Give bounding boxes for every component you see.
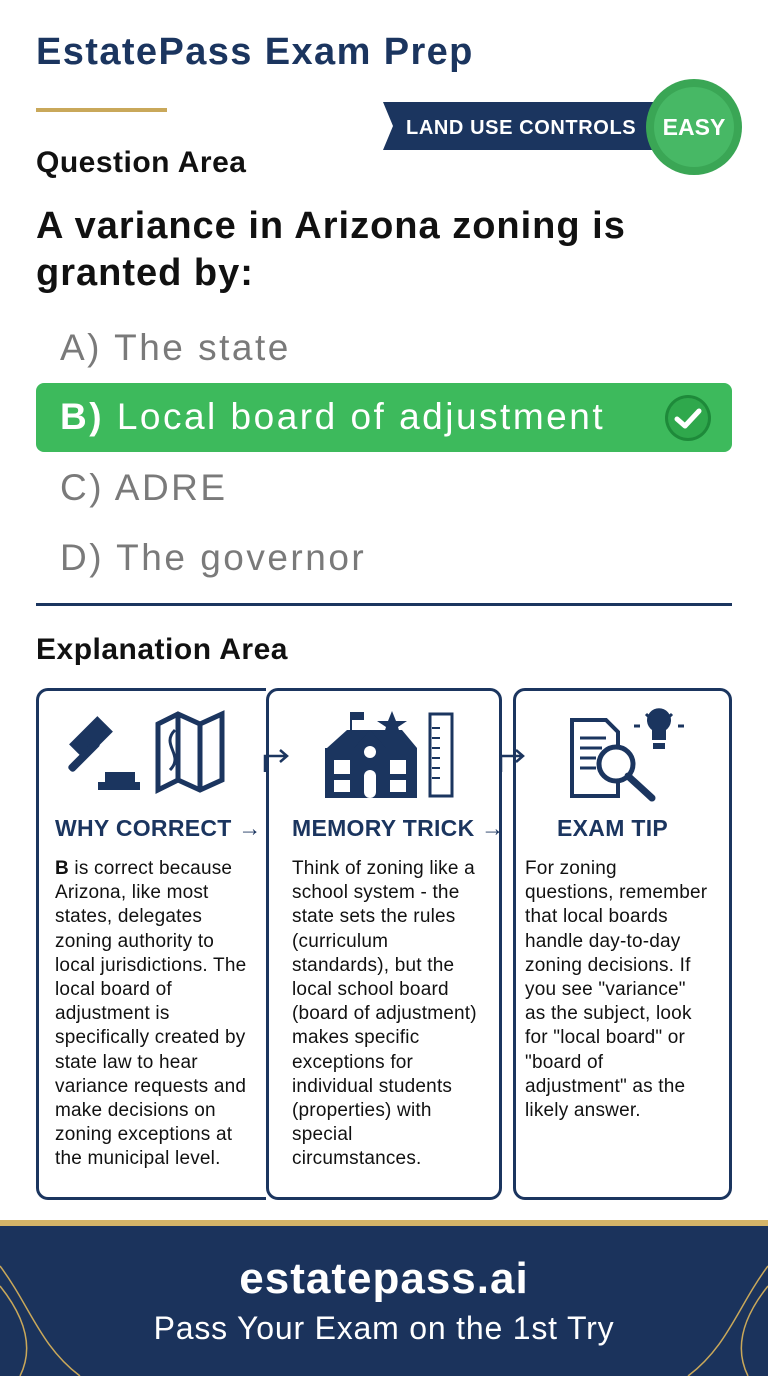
icon: check xyxy=(665,395,711,441)
heading: memory trick: MEMORY TRICK → xyxy=(292,815,504,841)
icon: school xyxy=(325,711,454,798)
option D: D) The governor xyxy=(60,537,366,578)
icon: document magnifier lightbulb xyxy=(570,708,684,802)
heading: exam tip: EXAM TIP xyxy=(557,815,668,841)
icon: gavel and map xyxy=(68,710,224,794)
arrow: to memory trick xyxy=(264,749,289,772)
arrow: to exam tip xyxy=(502,749,525,772)
heading: question area: Question Area xyxy=(36,146,246,179)
text: exam tip: For zoning questions, remember that local boards handle day-to-day zoning decisions. If you see "variance" as the subject, look for "local board" or "board of adjustment" as the likely answer. xyxy=(525,858,707,1121)
heading: explanation area: Explanation Area xyxy=(36,633,288,666)
question text: A variance in Arizona zoning is granted by: xyxy=(36,205,626,294)
badge: easy xyxy=(646,79,742,175)
text: why correct: B is correct because Arizona, like most states, delegates zoning authority to local jurisdictions. The local board of adjustment is specifically created by state law to hear variance requests and make decisions on zoning exceptions at the municipal level. xyxy=(55,858,246,1169)
badge: easy: EASY xyxy=(663,114,725,140)
heading: why correct: WHY CORRECT → xyxy=(55,815,262,841)
footer: tagline: Pass Your Exam on the 1st Try xyxy=(154,1310,614,1346)
panel: memory trick xyxy=(266,688,502,1200)
option B correct xyxy=(36,383,732,452)
option C: C) ADRE xyxy=(60,467,228,508)
category ribbon xyxy=(383,102,654,150)
title: EstatePass Exam Prep xyxy=(36,31,474,73)
option B correct: B) Local board of adjustment xyxy=(60,396,605,437)
category ribbon: LAND USE CONTROLS xyxy=(406,117,636,139)
panel: why correct xyxy=(36,688,266,1200)
footer xyxy=(0,1220,768,1376)
panel: exam tip xyxy=(513,688,732,1200)
option A: A) The state xyxy=(60,327,291,368)
text: memory trick: Think of zoning like a school system - the state sets the rules (curriculum standards), but the local school board (board of adjustment) makes specific exceptions for individual students (properties) with special circumstances. xyxy=(292,858,477,1169)
gold accent line xyxy=(36,108,167,112)
footer: brand: estatepass.ai xyxy=(239,1254,529,1303)
